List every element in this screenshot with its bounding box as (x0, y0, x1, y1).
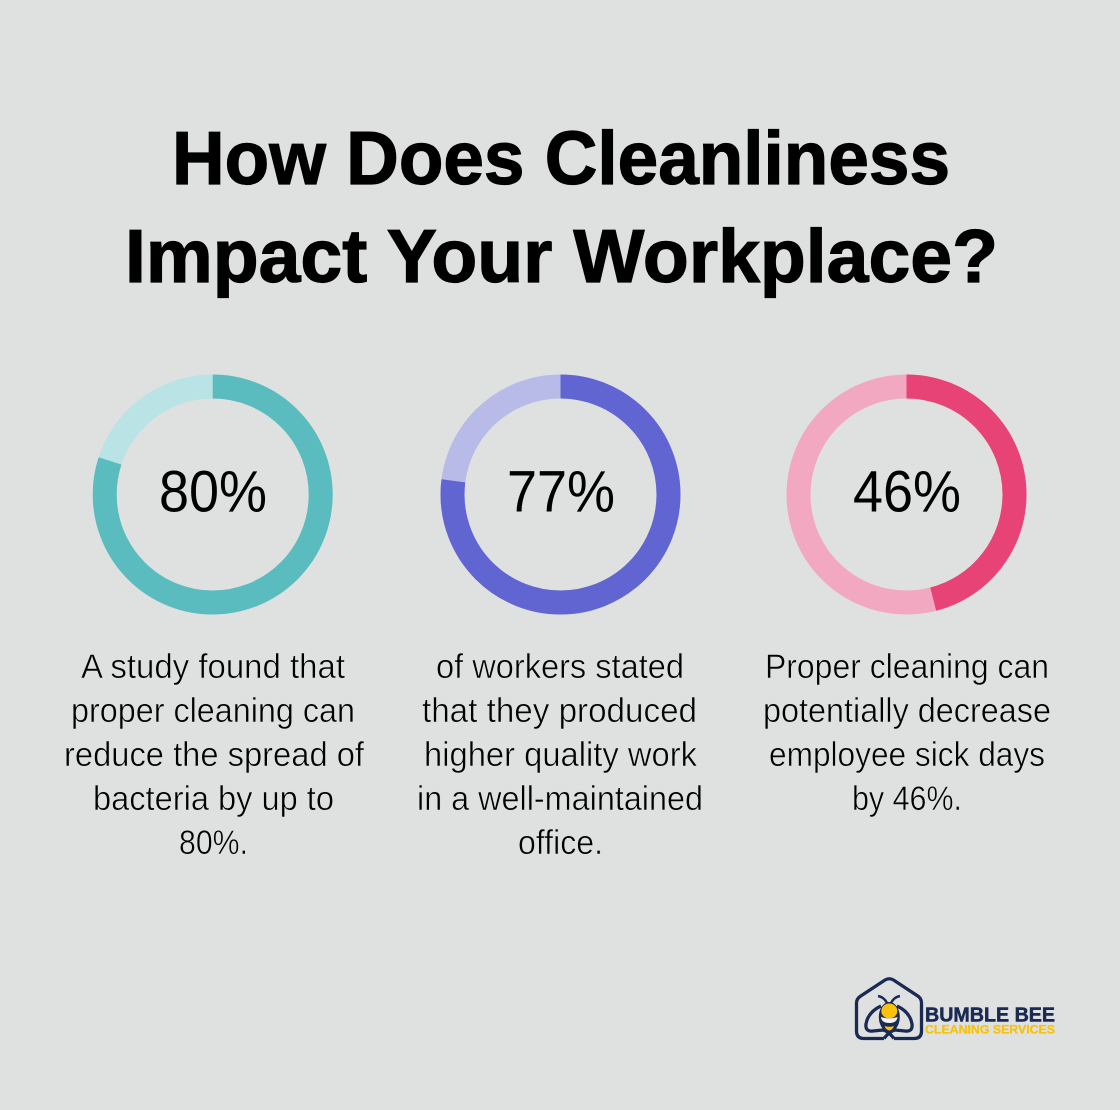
description: 80%: proper cleaning can (71, 692, 355, 730)
description: 77% (417, 648, 703, 862)
logo tagline: CLEANING SERVICES (925, 1022, 1055, 1036)
description: 46%: employee sick days (769, 736, 1045, 774)
title (125, 116, 998, 298)
description: 80%: reduce the spread of (64, 736, 365, 774)
description: 77%: in a well-maintained (417, 780, 703, 818)
description: 77%: higher quality work (424, 736, 698, 774)
donut chart: 77% (452, 386, 668, 602)
panel: 80% statistic (64, 386, 365, 862)
panel: 77% statistic (417, 386, 703, 862)
title: Impact Your Workplace? (125, 214, 998, 298)
number: 46%: 46% (853, 460, 961, 524)
number: 80%: 80% (159, 460, 267, 524)
icon: bee (866, 996, 912, 1038)
title: How Does Cleanliness (172, 116, 950, 200)
logo: Bumble Bee Cleaning Services (856, 979, 1055, 1038)
description: 46%: by 46%. (852, 780, 962, 818)
description: 80%: A study found that (81, 648, 346, 686)
description: 77%: of workers stated (436, 648, 684, 686)
panel: 46% statistic (763, 386, 1051, 818)
description: 46% (763, 648, 1051, 818)
logo wordmark: BUMBLE BEE (925, 1004, 1055, 1026)
number: 77%: 77% (507, 460, 615, 524)
description: 77%: that they produced (422, 692, 697, 730)
description: 80%: 80%. (179, 824, 248, 862)
icon: house outline (856, 979, 922, 1038)
description: 80% (64, 648, 365, 862)
description: 46%: Proper cleaning can (765, 648, 1049, 686)
description: 77%: office. (518, 824, 603, 862)
description: 46%: potentially decrease (763, 692, 1051, 730)
donut chart: 46% (798, 386, 1014, 602)
donut chart: 80% (105, 386, 321, 602)
description: 80%: bacteria by up to (93, 780, 334, 818)
